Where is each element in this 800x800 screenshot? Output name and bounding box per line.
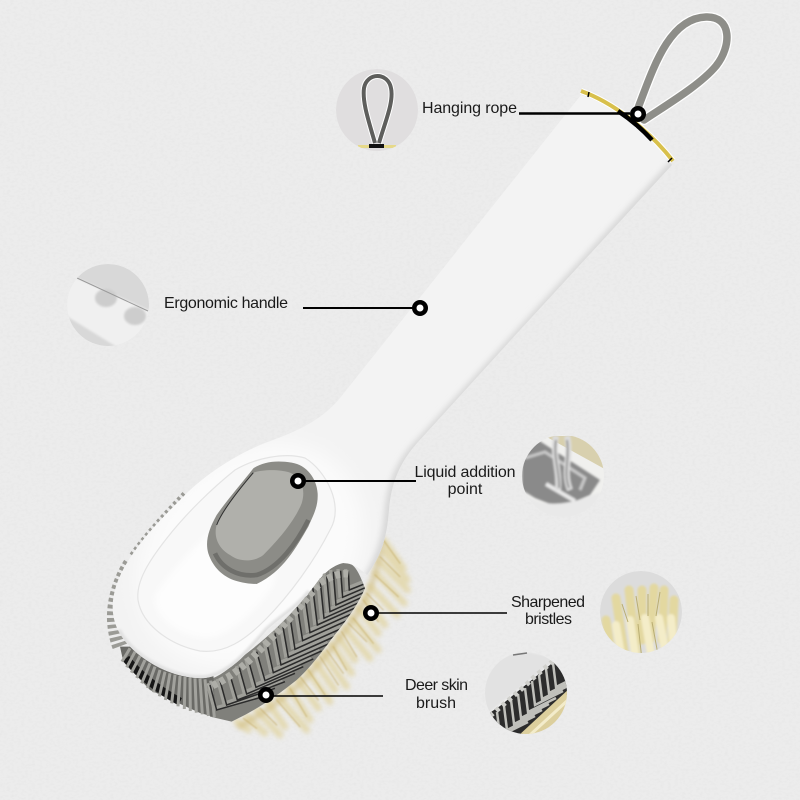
inner well highlight: [155, 515, 275, 638]
callout: sharpened bristles: [363, 571, 682, 660]
handle and head body: [112, 96, 672, 678]
rubber teeth and pad base: [115, 493, 365, 722]
right edge shade of handle: [372, 165, 680, 582]
callout: hanging rope: [336, 69, 646, 151]
dark tooth gaps: [126, 658, 180, 702]
head brightening: [139, 494, 352, 667]
recessed well: [138, 456, 335, 651]
upper teeth: [115, 564, 131, 648]
leader line: [272, 695, 383, 697]
thumbnail: liquid filling: [522, 436, 604, 505]
label line two: bristles: [525, 611, 572, 628]
thumbnail: bristles: [600, 571, 682, 660]
thumbnail: deer skin brush: [485, 652, 567, 734]
push button: [207, 461, 318, 584]
callout: ergonomic handle: [60, 264, 428, 352]
marker dot: [630, 106, 646, 122]
label line two: point: [448, 481, 483, 498]
gold rim of handle: [581, 91, 673, 162]
hanging rope loop: [638, 17, 727, 120]
bristles: [237, 540, 408, 735]
brush illustration: [91, 80, 700, 735]
lower rim shade: [118, 592, 310, 678]
rubber pad chevrons: [207, 569, 370, 710]
label: hanging rope: Hanging rope: [422, 100, 517, 117]
leader line: [519, 112, 630, 115]
label: ergonomic handle: Ergonomic handle: [164, 295, 288, 312]
leader line: [303, 307, 414, 309]
marker dot: [412, 300, 428, 316]
thumbnail: rope: [336, 69, 418, 151]
rib tops: [208, 574, 348, 687]
callout: deer skin brush: [258, 652, 567, 734]
marker dot: [290, 473, 306, 489]
leader line: [376, 612, 507, 614]
lower teeth ribs: [122, 648, 214, 717]
leader line: [304, 480, 416, 482]
marker dot: [363, 605, 379, 621]
pad fill: [207, 562, 365, 722]
dashed upper rib edge: [130, 493, 184, 557]
label line two: brush: [416, 695, 456, 712]
marker dot: [258, 687, 274, 703]
callout: liquid addition point: [290, 436, 604, 505]
label: sharpened bristles: Sharpened: [511, 594, 585, 611]
label: liquid addition point: Liquid addition: [414, 464, 516, 481]
lower teeth base: [120, 647, 215, 717]
thumbnail: handle grips: [70, 264, 149, 346]
label: deer skin brush: Deer skin: [405, 677, 468, 694]
